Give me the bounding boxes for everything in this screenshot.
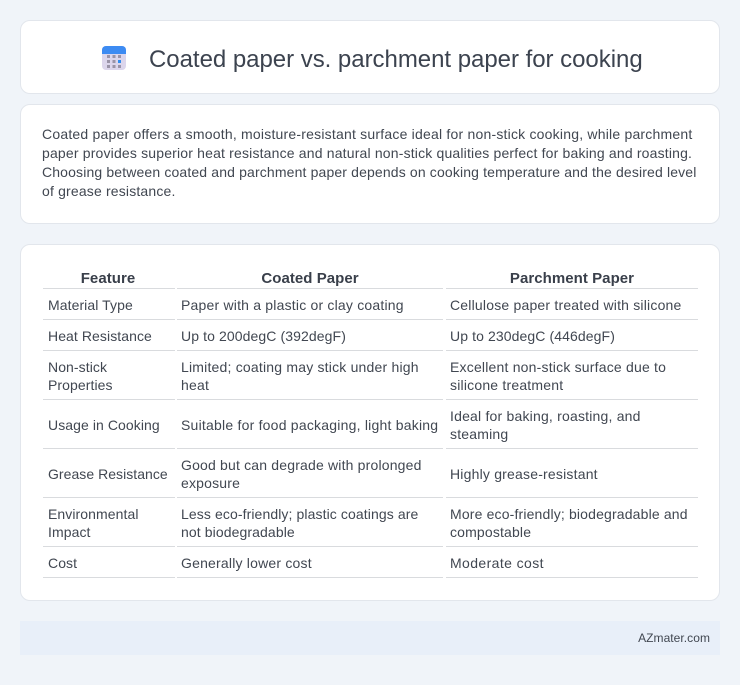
row: material type bbox=[48, 297, 682, 313]
row: heat resistance bbox=[48, 328, 615, 344]
row: environmental impact: More eco-friendly; biodegradable and bbox=[450, 506, 688, 522]
row: usage in cooking: Suitable for food packaging, light baking bbox=[181, 417, 438, 433]
row: non-stick properties: heat bbox=[181, 377, 209, 393]
intro text: Choosing between coated and parchment paper depends on cooking temperature and the desired level bbox=[42, 164, 696, 180]
footer bar bbox=[20, 621, 720, 655]
table header: Coated Paper bbox=[261, 270, 359, 287]
intro text: paper provides superior heat resistance and natural non-stick qualities perfect for baking and roasting. bbox=[42, 145, 692, 161]
footer text: AZmater.com bbox=[638, 631, 710, 645]
row: grease resistance: exposure bbox=[181, 475, 240, 491]
row: environmental impact: Impact bbox=[48, 524, 90, 540]
intro text: of grease resistance. bbox=[42, 183, 176, 199]
row: cost: Moderate cost bbox=[450, 555, 544, 571]
intro text: Coated paper offers a smooth, moisture-resistant surface ideal for non-stick cooking, while parchment bbox=[42, 126, 692, 142]
table header bbox=[81, 270, 634, 287]
row: grease resistance bbox=[48, 457, 598, 491]
panel: comparison table bbox=[20, 244, 720, 601]
row: non-stick properties bbox=[48, 359, 666, 393]
row: environmental impact: compostable bbox=[450, 524, 531, 540]
row: environmental impact bbox=[48, 506, 688, 540]
icon: calendar bbox=[102, 46, 126, 70]
row: non-stick properties: Non-stick bbox=[48, 359, 107, 375]
row: heat resistance: Up to 200degC (392degF) bbox=[181, 328, 346, 344]
row: environmental impact: not biodegradable bbox=[181, 524, 295, 540]
row: grease resistance: Grease Resistance bbox=[48, 466, 168, 482]
panel: title card bbox=[20, 20, 720, 94]
row: cost: Generally lower cost bbox=[181, 555, 312, 571]
row: non-stick properties: Properties bbox=[48, 377, 113, 393]
row: material type: Material Type bbox=[48, 297, 133, 313]
row: usage in cooking: Usage in Cooking bbox=[48, 417, 160, 433]
row: non-stick properties: silicone treatment bbox=[450, 377, 563, 393]
table header: Parchment Paper bbox=[510, 270, 634, 287]
title: Coated paper vs. parchment paper for cooking bbox=[149, 46, 643, 73]
row: non-stick properties: Limited; coating may stick under high bbox=[181, 359, 419, 375]
row: non-stick properties: Excellent non-stick surface due to bbox=[450, 359, 666, 375]
row: environmental impact: Less eco-friendly; plastic coatings are bbox=[181, 506, 418, 522]
row: usage in cooking: steaming bbox=[450, 426, 508, 442]
row: usage in cooking bbox=[48, 408, 641, 442]
row: cost: Cost bbox=[48, 555, 77, 571]
row: cost bbox=[48, 555, 544, 571]
row: material type: Cellulose paper treated with silicone bbox=[450, 297, 682, 313]
comparison table bbox=[43, 270, 698, 578]
row: usage in cooking: Ideal for baking, roasting, and bbox=[450, 408, 641, 424]
row: material type: Paper with a plastic or clay coating bbox=[181, 297, 404, 313]
panel: introduction bbox=[20, 104, 720, 224]
row: heat resistance: Heat Resistance bbox=[48, 328, 152, 344]
table header: Feature bbox=[81, 270, 135, 287]
intro text bbox=[42, 126, 696, 199]
row: heat resistance: Up to 230degC (446degF) bbox=[450, 328, 615, 344]
row: environmental impact: Environmental bbox=[48, 506, 139, 522]
row: grease resistance: Highly grease-resistant bbox=[450, 466, 598, 482]
row: grease resistance: Good but can degrade with prolonged bbox=[181, 457, 422, 473]
